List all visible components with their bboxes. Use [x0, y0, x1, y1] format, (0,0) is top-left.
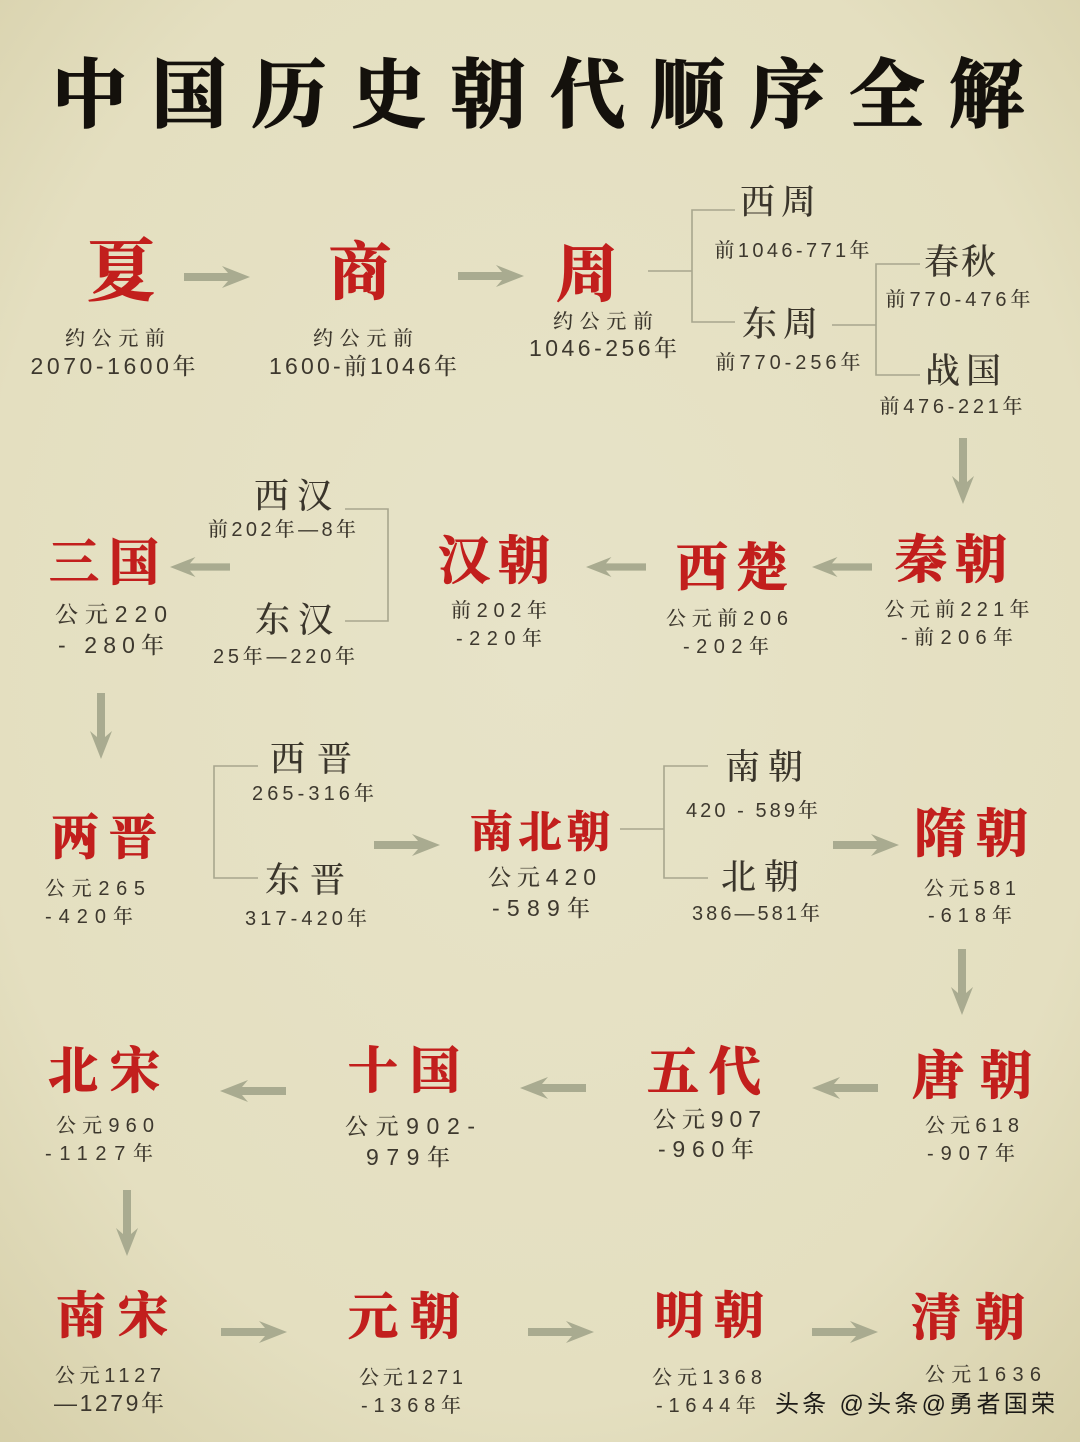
row 3: 隋朝 [914, 792, 1028, 927]
row 4: 唐朝 [912, 1034, 1032, 1165]
row 1: 商: 1600-前1046年 [269, 353, 457, 379]
bracket: 周 branches [648, 210, 735, 322]
南朝: 420 - 589年 [686, 798, 818, 822]
row 3: 两晋: 两晋 [51, 799, 157, 868]
arrow: 唐朝 to 五代 [812, 1077, 878, 1099]
西汉: 西汉 [254, 469, 332, 519]
row 2: 三国: 公元220 [55, 601, 167, 627]
watermark: 头条 @头条@勇者国荣 [775, 1391, 1055, 1418]
西周 [714, 175, 870, 262]
row 1: 周: 周 [556, 224, 618, 315]
row 2: 汉朝: 汉朝 [438, 519, 550, 594]
row 2: 三国: 三国 [49, 523, 159, 595]
row 5: 元朝 [348, 1277, 463, 1417]
row 5: 元朝: -1368年 [361, 1393, 461, 1417]
row 3: 隋朝: -618年 [928, 903, 1012, 927]
row 4: 五代: -960年 [658, 1136, 754, 1162]
东汉: 东汉 [255, 593, 333, 643]
西晋: 西晋 [270, 732, 352, 782]
row 2: 秦朝: 公元前221年 [884, 597, 1030, 621]
row 4: 十国: 公元902- [345, 1113, 475, 1139]
row 2: 秦朝 [884, 518, 1030, 649]
arrow: 商 to 周 [458, 265, 524, 287]
row 1: 商 [269, 222, 457, 379]
row 2: 秦朝: 秦朝 [895, 518, 1007, 593]
arrow: 南宋 to 元朝 [221, 1321, 287, 1343]
row 4: 十国 [345, 1031, 475, 1170]
row 1: 商: 约公元前 [313, 327, 413, 350]
row 2: 西楚 [666, 526, 789, 658]
row 5: 明朝 [652, 1276, 764, 1417]
row 3: 隋朝: 公元581 [924, 877, 1016, 900]
东汉 [213, 593, 355, 668]
arrow: 五代 to 十国 [520, 1077, 586, 1099]
西晋: 265-316年 [252, 781, 374, 805]
arrow: to 三国 [170, 557, 230, 577]
row 2: 西楚: 公元前206 [666, 607, 788, 630]
row 5: 明朝: -1644年 [656, 1393, 756, 1417]
row 4: 十国: 十国 [348, 1031, 460, 1103]
row 3: 两晋: 公元265 [45, 877, 145, 900]
row 5: 南宋: 公元1127 [55, 1364, 161, 1387]
row 5: 南宋: —1279年 [54, 1390, 164, 1416]
row 5: 清朝: 清朝 [911, 1278, 1025, 1350]
row 3: 南北朝 [470, 799, 610, 921]
南朝: 南朝 [725, 740, 803, 790]
row 2: 西楚: -202年 [683, 634, 769, 658]
row 1: 夏: 2070-1600年 [30, 353, 196, 379]
bracket: 东周 branches [832, 264, 920, 375]
row 4: 唐朝: 公元618 [925, 1114, 1019, 1137]
春秋: 前770-476年 [886, 287, 1030, 311]
row 3: 南北朝: 公元420 [488, 864, 596, 890]
row 5: 元朝: 公元1271 [359, 1366, 463, 1389]
row 4: 北宋: 北宋 [48, 1031, 160, 1103]
row 1: 夏 [30, 218, 196, 379]
战国 [880, 344, 1022, 418]
南朝 [686, 740, 818, 822]
东周: 东周 [742, 297, 818, 347]
北朝: 北朝 [721, 850, 799, 900]
row 1: 周: 1046-256年 [529, 335, 677, 361]
北朝: 386—581年 [692, 901, 820, 925]
row 5: 南宋 [54, 1276, 168, 1416]
row 2: 秦朝: -前206年 [901, 625, 1013, 649]
row 4: 五代: 五代 [647, 1030, 761, 1105]
北朝 [692, 850, 820, 925]
row 4: 北宋: -1127年 [45, 1141, 153, 1165]
arrow: 东晋 to 南北朝 [374, 834, 440, 856]
row 4: 北宋 [45, 1031, 160, 1165]
春秋 [886, 235, 1030, 311]
东周 [716, 297, 860, 374]
row 5: 清朝: 公元1636 [925, 1363, 1041, 1386]
row 5: 明朝: 公元1368 [652, 1366, 762, 1389]
春秋: 春秋 [924, 235, 996, 285]
row 2: 三国 [49, 523, 167, 658]
arrow: 隋朝 to 唐朝 [951, 949, 973, 1015]
row 4: 唐朝: -907年 [927, 1141, 1015, 1165]
arrow: 战国 to 秦朝 [952, 438, 974, 504]
row 2: 汉朝: -220年 [456, 626, 542, 650]
row 2: 三国: - 280年 [58, 632, 164, 658]
arrow: 北宋 to 南宋 [116, 1190, 138, 1256]
arrow: 三国 to 两晋 [90, 693, 112, 759]
arrow: 南北朝 to 隋朝 [833, 834, 899, 856]
东汉: 25年—220年 [213, 644, 355, 668]
row 2: 西楚: 西楚 [676, 526, 789, 601]
西汉 [208, 469, 356, 541]
arrow: 夏 to 商 [184, 266, 250, 288]
row 1: 周: 约公元前 [553, 310, 653, 333]
bracket: 汉 branches [345, 509, 388, 621]
西周: 前1046-771年 [714, 238, 870, 262]
row 1: 周 [529, 224, 677, 361]
title: 中国历史朝代顺序全解 [52, 36, 1024, 143]
row 5: 明朝: 明朝 [654, 1276, 764, 1348]
row 5: 南宋: 南宋 [56, 1276, 168, 1348]
arrow: 秦朝 to 西楚 [812, 557, 872, 577]
row 1: 夏: 夏 [87, 218, 155, 315]
东周: 前770-256年 [716, 350, 860, 374]
战国: 前476-221年 [880, 394, 1022, 418]
东晋 [245, 853, 367, 930]
西汉: 前202年—8年 [208, 517, 356, 541]
arrow: 西楚 to 汉朝 [586, 557, 646, 577]
bracket: 晋 branches [214, 766, 258, 878]
row 3: 南北朝: 南北朝 [470, 799, 610, 860]
arrow: 明朝 to 清朝 [812, 1321, 878, 1343]
西周: 西周 [740, 175, 816, 225]
arrow: 十国 to 北宋 [220, 1080, 286, 1102]
西晋 [252, 732, 374, 805]
row 1: 夏: 约公元前 [65, 327, 165, 350]
row 2: 汉朝: 前202年 [451, 598, 547, 622]
东晋: 东晋 [265, 853, 345, 903]
row 4: 唐朝: 唐朝 [912, 1034, 1032, 1109]
row 4: 北宋: 公元960 [56, 1114, 154, 1137]
东晋: 317-420年 [245, 906, 367, 930]
row 5: 元朝: 元朝 [348, 1277, 460, 1349]
row 3: 隋朝: 隋朝 [914, 792, 1028, 867]
战国: 战国 [925, 344, 1001, 394]
row 4: 五代 [647, 1030, 761, 1162]
arrow: 元朝 to 明朝 [528, 1321, 594, 1343]
row 2: 汉朝 [438, 519, 550, 650]
row 4: 十国: 979年 [366, 1144, 450, 1170]
row 1: 商: 商 [328, 222, 392, 313]
bracket: 南北朝 branches [620, 766, 708, 878]
row 3: 两晋 [45, 799, 157, 928]
row 5: 清朝 [911, 1278, 1041, 1386]
row 3: 两晋: -420年 [45, 904, 133, 928]
row 4: 五代: 公元907 [653, 1106, 761, 1132]
row 3: 南北朝: -589年 [492, 895, 590, 921]
